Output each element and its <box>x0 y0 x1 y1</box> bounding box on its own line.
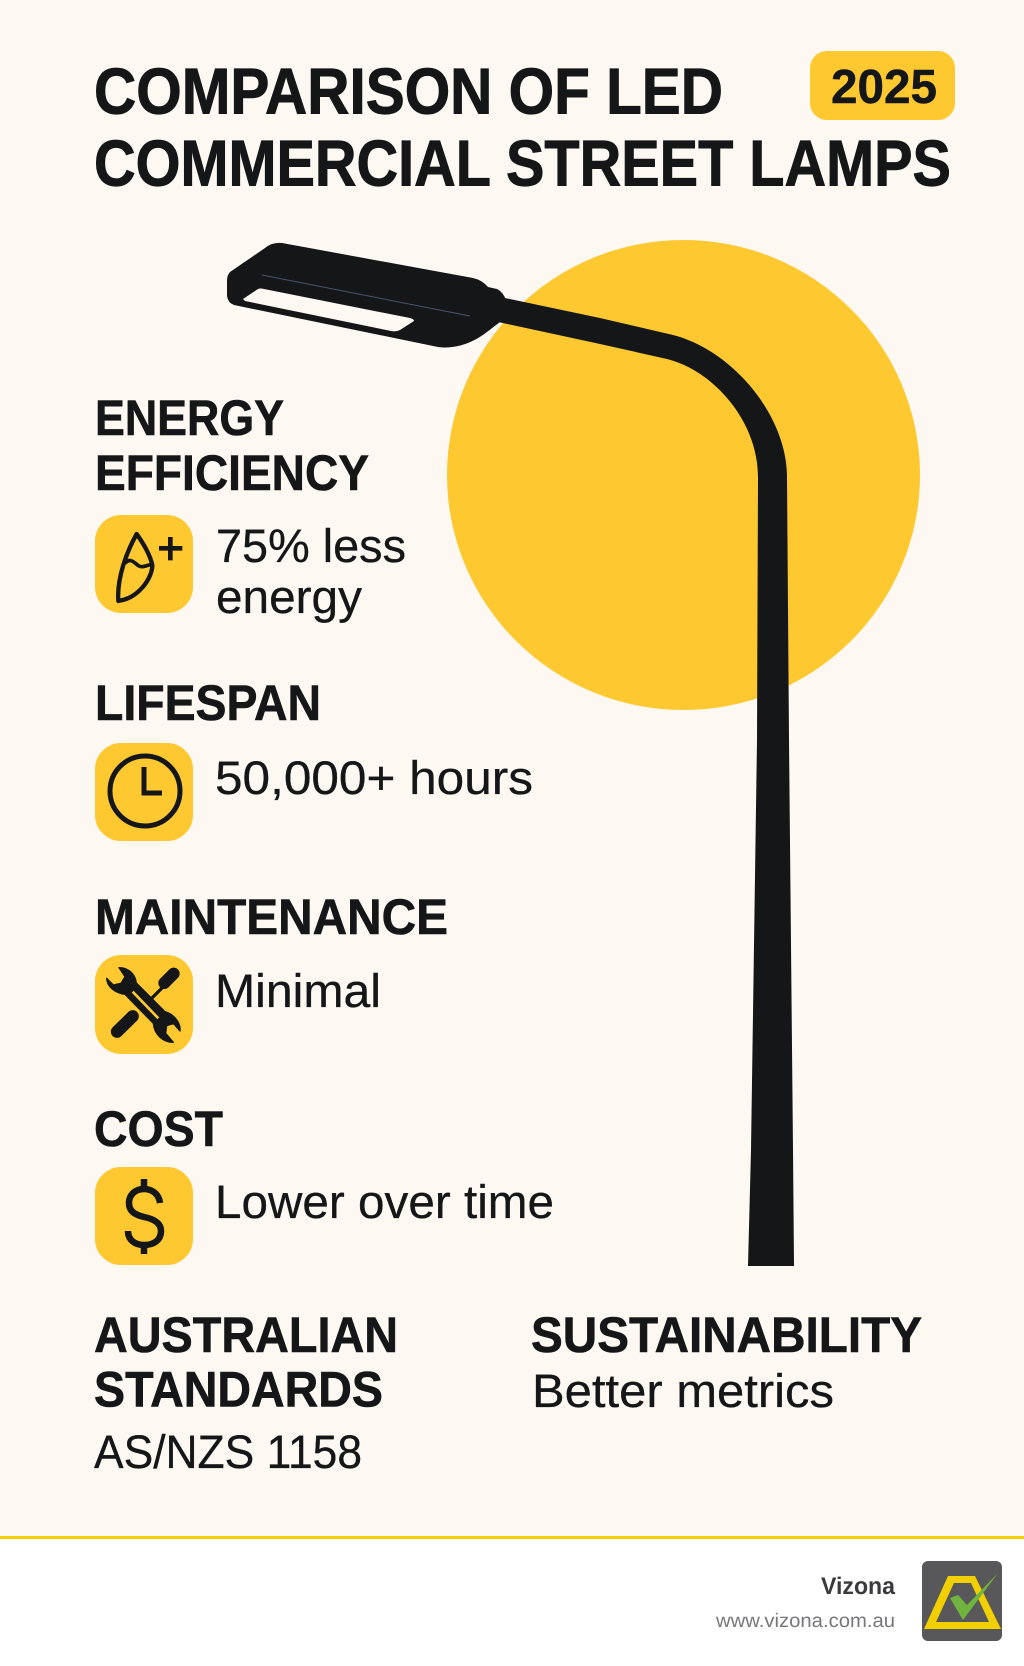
title <box>94 54 951 200</box>
lamp highlight line <box>262 275 470 316</box>
footer brand text: Vizona <box>821 1573 896 1600</box>
panel: cost <box>94 1101 554 1265</box>
icon: wrench and screwdriver <box>95 955 193 1054</box>
value: AS/NZS 1158: AS/NZS 1158 <box>94 1425 362 1478</box>
heading: australian standards <box>94 1307 398 1418</box>
heading: australian standards: AUSTRALIAN <box>94 1307 398 1363</box>
icon: dollar sign <box>95 1167 193 1265</box>
heading: australian standards: STANDARDS <box>94 1362 383 1418</box>
panel: maintenance <box>95 889 448 1054</box>
value: 75% less energy: 75% less <box>216 519 406 572</box>
heading: energy efficiency: EFFICIENCY <box>95 445 369 501</box>
panel: sustainability <box>531 1307 922 1417</box>
panel: energy efficiency <box>95 390 406 623</box>
panel: australian standards <box>94 1307 398 1478</box>
footer brand text: www.vizona.com.au <box>715 1610 895 1632</box>
value: lower over time: Lower over time <box>215 1175 554 1228</box>
year badge: 2025 <box>831 61 937 114</box>
sun circle <box>447 240 920 710</box>
heading: energy efficiency <box>95 390 369 501</box>
value: 75% less energy <box>216 519 406 623</box>
heading: energy efficiency: ENERGY <box>95 390 284 446</box>
lamp light window <box>243 288 414 331</box>
year badge <box>810 51 955 120</box>
heading: sustainability: SUSTAINABILITY <box>531 1307 922 1363</box>
panel: lifespan <box>95 675 533 841</box>
heading: cost: COST <box>94 1101 223 1157</box>
heading: maintenance: MAINTENANCE <box>95 889 448 945</box>
street lamp <box>227 243 794 1266</box>
icon: clock <box>95 743 193 841</box>
value: 75% less energy: energy <box>216 570 362 623</box>
value: better metrics: Better metrics <box>532 1364 834 1417</box>
title: COMPARISON OF LED <box>94 54 723 128</box>
value: 50,000+ hours: 50,000+ hours <box>215 751 533 804</box>
footer brand text <box>715 1573 896 1632</box>
icon: energy flame with plus <box>95 515 193 613</box>
value: minimal: Minimal <box>215 964 381 1017</box>
icon: Vizona logo <box>922 1561 1002 1641</box>
lamp pole and arm <box>498 297 794 1266</box>
lamp head <box>227 243 506 348</box>
heading: lifespan: LIFESPAN <box>95 675 321 731</box>
